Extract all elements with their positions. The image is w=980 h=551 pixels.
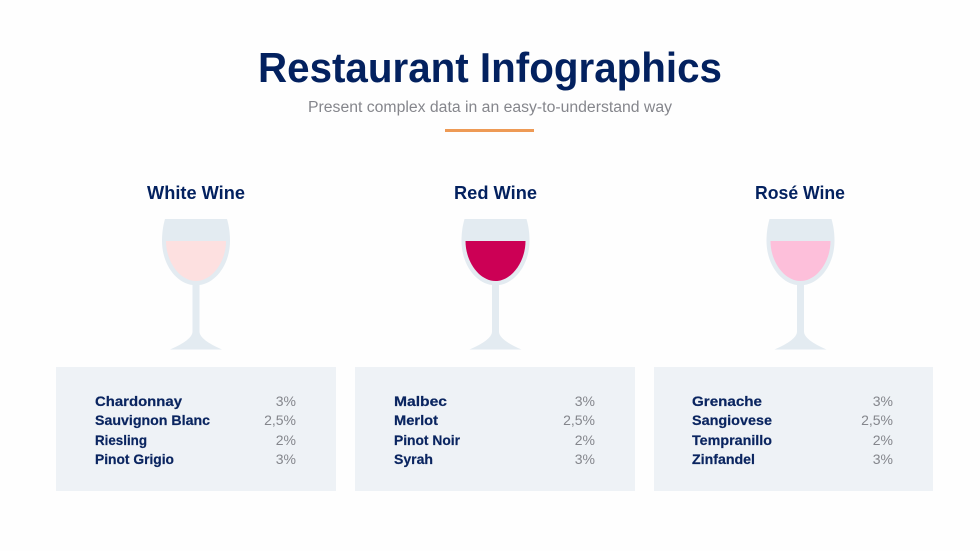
panel: red wine list: Syrah bbox=[394, 451, 433, 467]
column: white wine bbox=[56, 183, 336, 491]
accent line bbox=[445, 129, 534, 132]
heading: rose wine: Rosé Wine bbox=[755, 183, 845, 203]
icon: white wine glass bbox=[162, 219, 230, 350]
panel: rose wine list: 3% bbox=[873, 451, 893, 467]
column: red wine bbox=[355, 183, 635, 491]
panel: white wine list: Chardonnay bbox=[95, 393, 182, 409]
panel: red wine list: Merlot bbox=[394, 412, 438, 428]
panel: white wine list: 2% bbox=[276, 432, 296, 448]
panel: rose wine list: Tempranillo bbox=[692, 432, 772, 448]
panel: rose wine list: 2,5% bbox=[861, 412, 893, 428]
icon: rose wine glass bbox=[766, 219, 834, 350]
panel: red wine list: Malbec bbox=[394, 393, 447, 409]
panel: white wine list: 2,5% bbox=[264, 412, 296, 428]
panel: rose wine list: Grenache bbox=[692, 393, 762, 409]
title: Restaurant Infographics bbox=[258, 44, 722, 91]
panel: white wine list bbox=[56, 367, 336, 491]
panel: white wine list: Riesling bbox=[95, 432, 147, 448]
panel: rose wine list: Sangiovese bbox=[692, 412, 772, 428]
panel: red wine list: Pinot Noir bbox=[394, 432, 461, 448]
panel: red wine list: 3% bbox=[575, 393, 595, 409]
panel: rose wine list bbox=[654, 367, 933, 491]
subtitle: Present complex data in an easy-to-understand way bbox=[308, 99, 672, 116]
panel: red wine list: 2% bbox=[575, 432, 595, 448]
panel: red wine list bbox=[355, 367, 635, 491]
panel: rose wine list: 2% bbox=[873, 432, 893, 448]
panel: rose wine list: 3% bbox=[873, 393, 893, 409]
heading: white wine: White Wine bbox=[147, 183, 245, 203]
panel: white wine list: 3% bbox=[276, 393, 296, 409]
panel: red wine list: 3% bbox=[575, 451, 595, 467]
heading: red wine: Red Wine bbox=[454, 183, 537, 203]
icon: red wine glass bbox=[462, 219, 530, 350]
panel: white wine list: 3% bbox=[276, 451, 296, 467]
column: rose wine bbox=[654, 183, 933, 491]
panel: white wine list: Pinot Grigio bbox=[95, 451, 174, 467]
panel: red wine list: 2,5% bbox=[563, 412, 595, 428]
panel: rose wine list: Zinfandel bbox=[692, 451, 755, 467]
panel: white wine list: Sauvignon Blanc bbox=[95, 412, 210, 428]
